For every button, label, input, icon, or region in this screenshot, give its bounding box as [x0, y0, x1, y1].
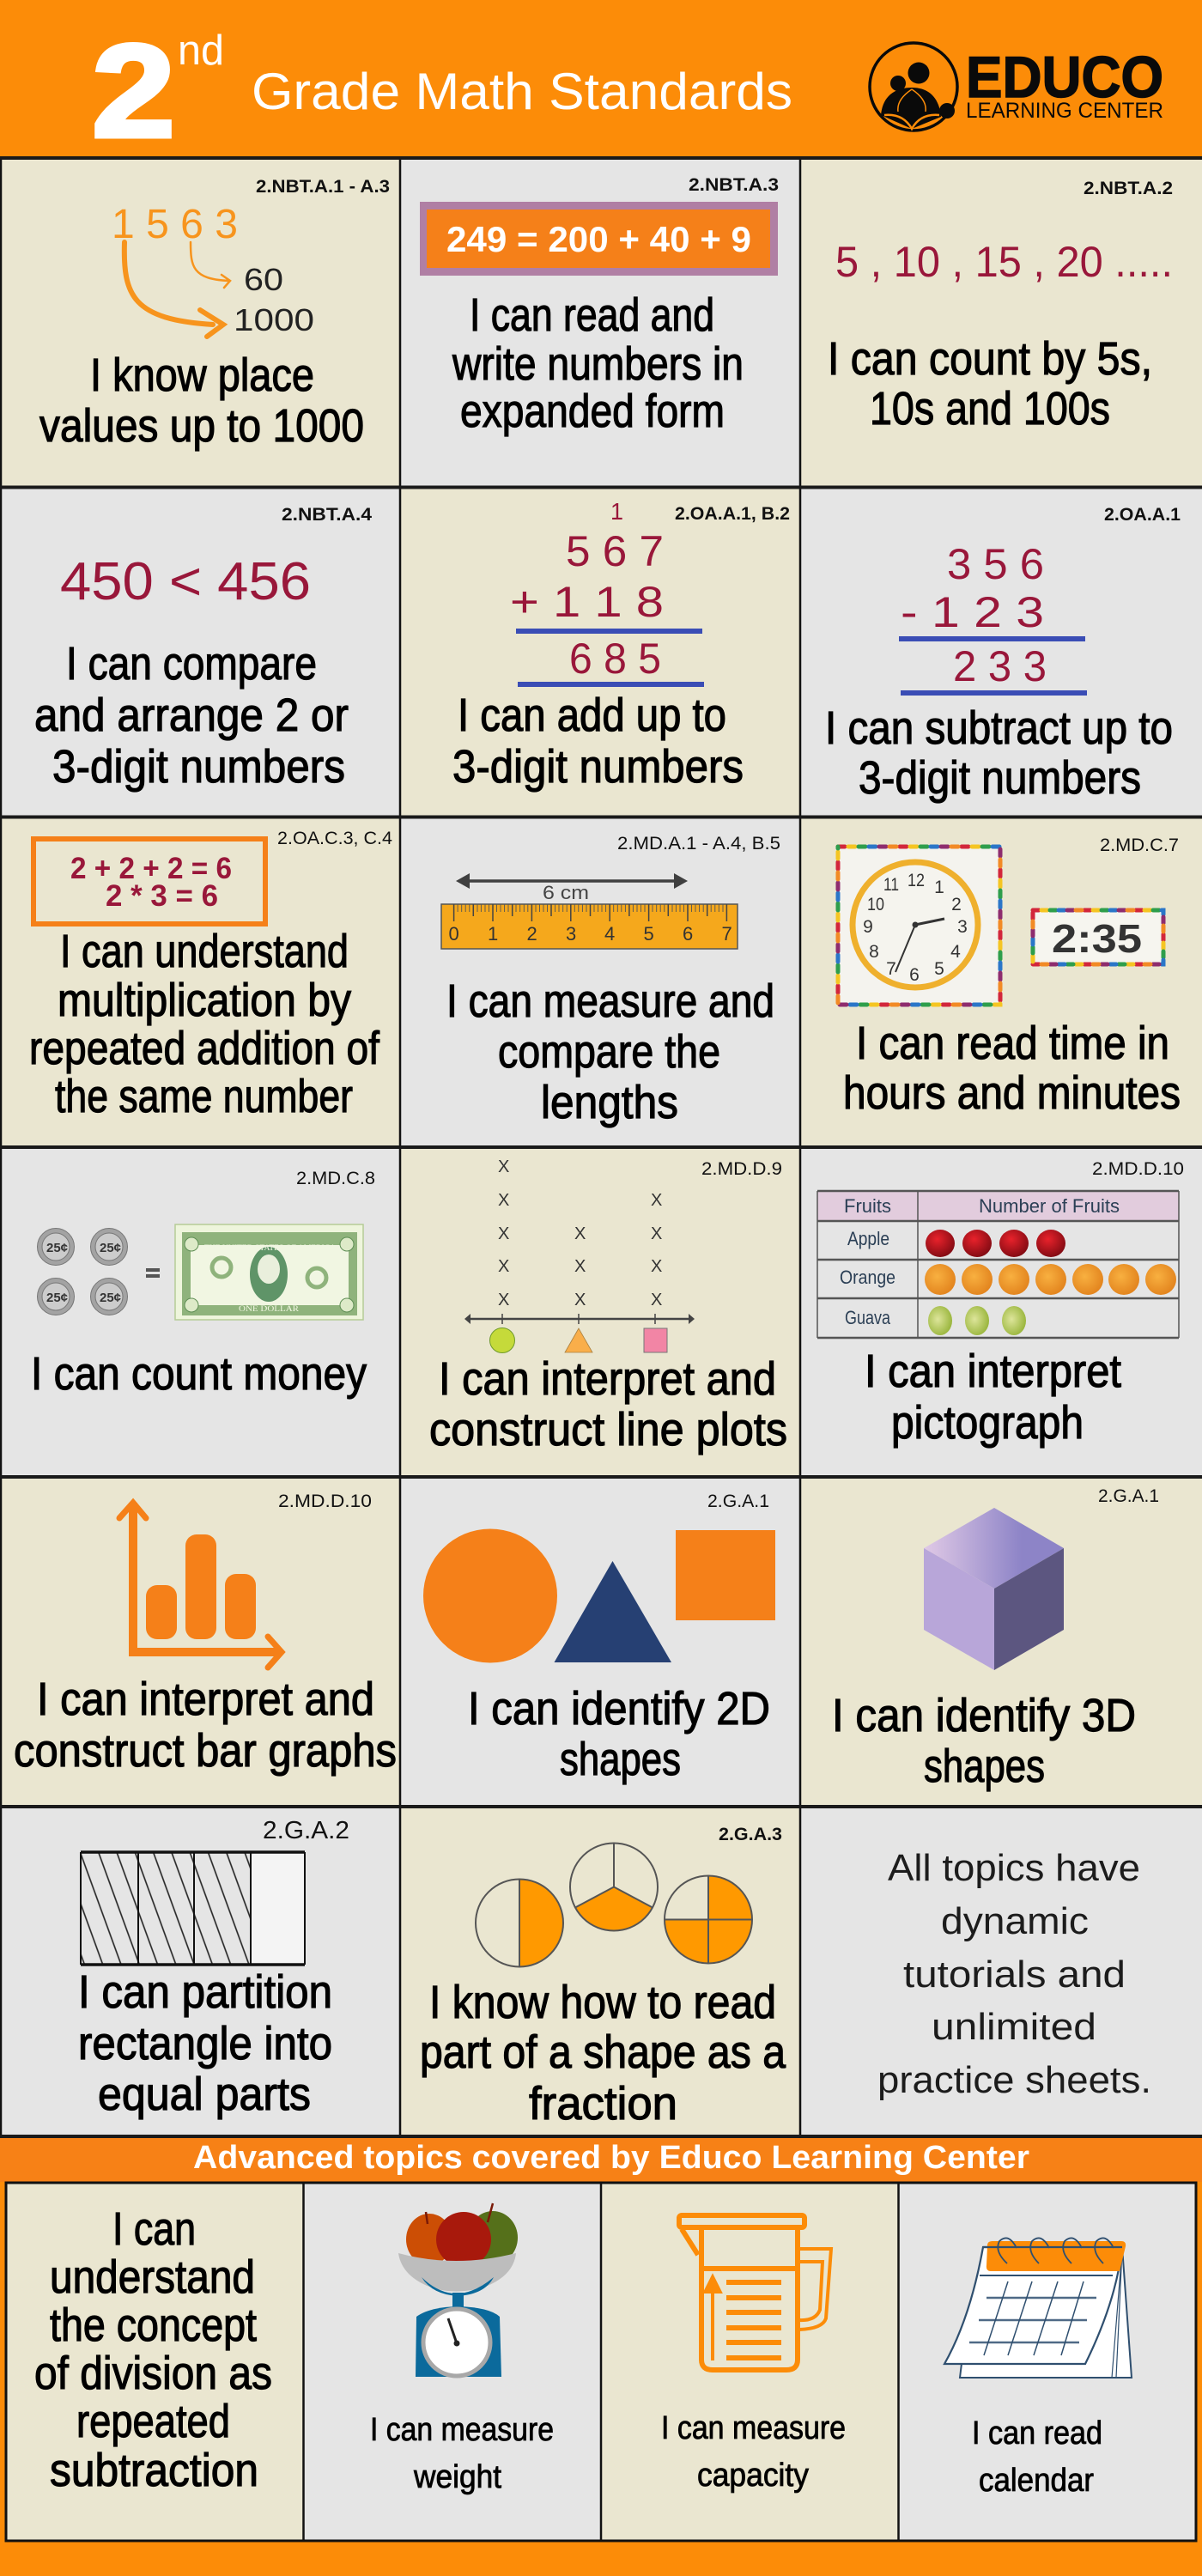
icon: dollar bill: ONE DOLLAR — [239, 1304, 299, 1313]
statement: I can count by 5s, — [828, 333, 1152, 385]
pictograph table — [817, 1191, 1179, 1338]
icon: ruler: 5 — [644, 923, 654, 945]
statement: I can read — [972, 2415, 1102, 2451]
column addition — [510, 498, 704, 687]
statement: equal parts — [98, 2069, 311, 2120]
statement — [429, 1353, 787, 1455]
statement: 10s and 100s — [870, 383, 1110, 434]
note text: All topics have — [888, 1847, 1140, 1889]
icon: analog clock: 4 — [950, 942, 961, 962]
standard code: 2.OA.A.1, B.2 — [675, 504, 790, 524]
logo: Educo Learning Center — [870, 43, 1163, 131]
advanced topics heading band: Advanced topics covered by Educo Learning Center — [193, 2140, 1029, 2176]
statement: I can partition — [78, 1966, 332, 2018]
statement: construct line plots — [429, 1404, 787, 1455]
icon: measuring jug — [679, 2215, 831, 2370]
icon: digital clock: 2:35 — [1052, 916, 1142, 961]
logo: Educo Learning Center: LEARNING CENTER — [966, 99, 1163, 123]
statement: understand — [50, 2251, 255, 2303]
standard code: 2.MD.C.7 — [1100, 835, 1179, 855]
statement: construct bar graphs — [14, 1725, 397, 1777]
icon: analog clock: 5 — [934, 959, 944, 979]
icon: circle — [423, 1528, 557, 1662]
icon: dollar bill — [175, 1224, 363, 1320]
statement: the concept — [50, 2300, 257, 2351]
statement: shapes — [560, 1734, 681, 1785]
icon: square — [676, 1530, 775, 1620]
arrow to 1000 — [124, 242, 223, 337]
statement: I can identify 3D — [832, 1690, 1136, 1741]
column addition: 5 6 7 — [566, 527, 664, 575]
panel: 2D shapes — [400, 1477, 800, 1807]
panel: fractions — [400, 1807, 800, 2136]
panel: all topics note — [800, 1807, 1202, 2136]
statement: I can measure — [370, 2412, 554, 2448]
standard code: 2.NBT.A.3 — [689, 175, 779, 195]
statement — [825, 702, 1173, 804]
statement: pictograph — [891, 1397, 1084, 1449]
icon: quarter coins: 25¢ — [46, 1241, 68, 1255]
statement: I can — [112, 2203, 196, 2255]
note text: practice sheets. — [877, 2059, 1151, 2101]
statement — [452, 690, 744, 793]
statement: weight — [413, 2459, 501, 2495]
line plot: X — [498, 1157, 509, 1176]
statement: I can interpret and — [439, 1353, 776, 1405]
title: Grade Math Standards: Grade Math Standards — [252, 63, 792, 120]
panel: compare numbers — [2, 488, 400, 817]
line plot: X — [498, 1257, 509, 1276]
pictograph table: Fruits — [844, 1195, 891, 1217]
statement: and arrange 2 or — [34, 690, 349, 741]
icon: analog clock: 11 — [883, 875, 899, 895]
title: big 2: 2 — [92, 17, 175, 165]
statement: repeated — [76, 2396, 230, 2447]
line plot: X — [651, 1257, 662, 1276]
arrow to 60 — [191, 242, 230, 288]
icon: digital clock — [1033, 910, 1163, 964]
skip count sequence: 5 , 10 , 15 , 20 ..... — [835, 238, 1173, 286]
icon: analog clock: 6 — [909, 965, 920, 985]
standard code: 2.NBT.A.2 — [1084, 179, 1173, 198]
statement — [34, 2203, 272, 2496]
panel: place values — [2, 158, 400, 488]
panel: reading time — [800, 817, 1202, 1147]
pictograph table: Guava — [845, 1307, 891, 1328]
icon: triangle — [555, 1561, 671, 1662]
number 1563: 1 5 6 3 — [112, 202, 238, 247]
statement: I can add up to — [458, 690, 726, 741]
line plot: X — [498, 1291, 509, 1309]
equals sign — [146, 1270, 160, 1276]
statement — [34, 638, 349, 793]
statement: fraction — [529, 2078, 677, 2129]
panel: money — [2, 1147, 400, 1477]
icon: quarter coins — [38, 1228, 127, 1315]
label 60: 60 — [244, 262, 283, 297]
column addition: 1 — [610, 498, 623, 525]
statement: 3-digit numbers — [452, 741, 744, 793]
statement — [446, 975, 774, 1128]
icon: analog clock: 2 — [951, 895, 962, 914]
statement: subtraction — [50, 2445, 258, 2496]
repeated addition box: 2 * 3 = 6 — [106, 879, 218, 913]
statement: capacity — [697, 2458, 809, 2494]
title: nd: nd — [178, 27, 224, 74]
icon: quarter coins: 25¢ — [46, 1291, 68, 1305]
statement — [972, 2415, 1102, 2499]
statement: I can interpret — [865, 1346, 1121, 1397]
statement — [14, 1674, 397, 1777]
line plot: X — [574, 1257, 586, 1276]
standard code: 2.NBT.A.4 — [282, 505, 372, 525]
icon: one half circle — [476, 1879, 563, 1966]
statement: expanded form — [460, 386, 725, 437]
panel: subtraction — [800, 488, 1202, 817]
comparison: 450 < 456 — [60, 552, 311, 611]
icon: quarter coins: 25¢ — [100, 1291, 121, 1305]
note text: unlimited — [932, 2006, 1096, 2048]
statement — [832, 1690, 1136, 1792]
note text: tutorials and — [903, 1953, 1126, 1996]
panel: 3D shapes — [800, 1477, 1202, 1807]
icon: partitioned rectangle — [81, 1852, 305, 1965]
icon: analog clock — [838, 847, 1000, 1005]
standard code: 2.NBT.A.1 - A.3 — [256, 177, 390, 197]
panel: multiplication — [2, 817, 400, 1147]
repeated addition box: 2 + 2 + 2 = 6 — [70, 852, 232, 885]
statement: I can read and — [470, 289, 714, 341]
icon: dollar bill: THE UNITED STATES OF AMERICA — [204, 1243, 337, 1252]
line plot: X — [651, 1224, 662, 1243]
statement — [39, 349, 364, 452]
statement: values up to 1000 — [39, 400, 364, 452]
line plot: X — [651, 1191, 662, 1210]
standard code: 2.G.A.3 — [719, 1825, 782, 1844]
standard code: 2.G.A.2 — [263, 1817, 349, 1844]
line plot: X — [498, 1224, 509, 1243]
statement — [370, 2412, 554, 2495]
icon: analog clock: 9 — [863, 917, 873, 937]
logo: Educo Learning Center: EDUCO — [966, 45, 1163, 110]
standard code: 2.MD.C.8 — [296, 1169, 375, 1188]
repeated addition box — [33, 839, 265, 924]
statement: 3-digit numbers — [859, 752, 1141, 804]
statement — [420, 1977, 786, 2129]
panel: calendar — [898, 2183, 1197, 2541]
icon: ruler: 2 — [527, 923, 537, 945]
line plot — [464, 1157, 695, 1353]
icon: ruler — [441, 904, 738, 949]
column subtraction: - 1 2 3 — [901, 588, 1044, 636]
statement: I can understand — [60, 926, 349, 977]
statement: compare the — [498, 1026, 720, 1078]
line plot: X — [651, 1291, 662, 1309]
pictograph table: Orange — [840, 1267, 895, 1288]
panel: expanded form — [400, 158, 800, 488]
column addition: 6 8 5 — [569, 635, 661, 683]
statement: rectangle into — [78, 2018, 332, 2069]
icon: bar chart — [119, 1503, 282, 1668]
standard code: 2.MD.D.10 — [278, 1492, 372, 1511]
statement: shapes — [924, 1741, 1045, 1792]
statement: 3-digit numbers — [52, 741, 345, 793]
icon: double arrow 6 cm — [456, 873, 688, 903]
statement: I can count money — [31, 1348, 367, 1400]
panel: bar graphs — [2, 1477, 400, 1807]
icon: ruler: 1 — [488, 923, 498, 945]
statement — [843, 1018, 1181, 1119]
expanded form box: 249 = 200 + 40 + 9 — [446, 219, 751, 259]
icon: three quarters circle — [665, 1875, 752, 1963]
icon: calendar — [944, 2238, 1132, 2378]
line plot: X — [574, 1224, 586, 1243]
statement — [828, 333, 1152, 434]
standard code: 2.G.A.1 — [1098, 1486, 1159, 1506]
pictograph table: Apple — [847, 1228, 889, 1249]
statement: the same number — [55, 1071, 353, 1122]
panel: line plots — [400, 1147, 800, 1477]
column addition: + 1 1 8 — [510, 578, 664, 626]
statement: repeated addition of — [29, 1023, 380, 1074]
panel: addition — [400, 488, 800, 817]
statement: I can compare — [66, 638, 317, 690]
icon: ruler: 3 — [566, 923, 576, 945]
statement: of division as — [34, 2348, 272, 2399]
standard code: 2.OA.C.3, C.4 — [277, 829, 392, 848]
panel: weight — [303, 2183, 601, 2541]
icon: analog clock: 7 — [886, 959, 896, 979]
panel: division — [5, 2183, 303, 2541]
statement — [661, 2410, 846, 2494]
statement: I know how to read — [429, 1977, 776, 2028]
line plot: X — [498, 1191, 509, 1210]
icon: ruler: 6 — [683, 923, 693, 945]
statement — [452, 289, 744, 437]
icon: analog clock: 10 — [867, 895, 884, 914]
standard code: 2.G.A.1 — [707, 1492, 769, 1511]
statement: multiplication by — [58, 975, 351, 1026]
pictograph table: Number of Fruits — [979, 1195, 1120, 1217]
icon: cube — [924, 1508, 1064, 1670]
statement: calendar — [979, 2463, 1094, 2499]
statement — [865, 1346, 1121, 1449]
icon: ruler: 7 — [721, 923, 732, 945]
icon: weighing scale — [398, 2203, 518, 2377]
statement: I can identify 2D — [468, 1683, 770, 1735]
panel: partition rectangles — [2, 1807, 400, 2136]
header — [92, 17, 1163, 165]
icon: double arrow 6 cm: 6 cm — [543, 882, 589, 903]
icon: analog clock: 1 — [934, 878, 944, 897]
statement — [78, 1966, 332, 2120]
statement: I know place — [90, 349, 314, 401]
advanced topics heading band — [0, 2138, 1202, 2182]
icon: analog clock: 8 — [869, 942, 879, 962]
icon: ruler: 4 — [604, 923, 615, 945]
standard code: 2.MD.A.1 - A.4, B.5 — [617, 834, 780, 854]
statement: I can read time in — [856, 1018, 1169, 1069]
statement — [468, 1683, 770, 1785]
statement: part of a shape as a — [420, 2026, 786, 2078]
line plot: X — [574, 1291, 586, 1309]
panel: pictograph — [800, 1147, 1202, 1477]
column subtraction: 3 5 6 — [947, 540, 1044, 588]
standard code: 2.MD.D.10 — [1092, 1159, 1184, 1179]
icon: analog clock: 12 — [908, 871, 925, 890]
panel: measuring length — [400, 817, 800, 1147]
statement: lengths — [541, 1077, 678, 1128]
panel: skip counting — [800, 158, 1202, 488]
icon: quarter coins: 25¢ — [100, 1241, 121, 1255]
statement: I can interpret and — [37, 1674, 374, 1725]
standard code: 2.MD.D.9 — [701, 1159, 782, 1179]
note text — [877, 1847, 1151, 2101]
column subtraction — [899, 540, 1087, 696]
expanded form box — [420, 202, 778, 276]
icon: ruler: 0 — [448, 923, 459, 945]
panel: capacity — [601, 2183, 898, 2541]
standard code: 2.OA.A.1 — [1104, 505, 1181, 525]
note text: dynamic — [941, 1900, 1089, 1942]
statement: I can measure and — [446, 975, 774, 1027]
statement: write numbers in — [452, 338, 744, 390]
icon: analog clock: 3 — [957, 917, 968, 937]
label 1000: 1000 — [234, 302, 314, 337]
statement: I can measure — [661, 2410, 846, 2446]
icon: one third circle — [570, 1843, 658, 1931]
statement — [29, 926, 380, 1122]
column subtraction: 2 3 3 — [953, 642, 1047, 690]
